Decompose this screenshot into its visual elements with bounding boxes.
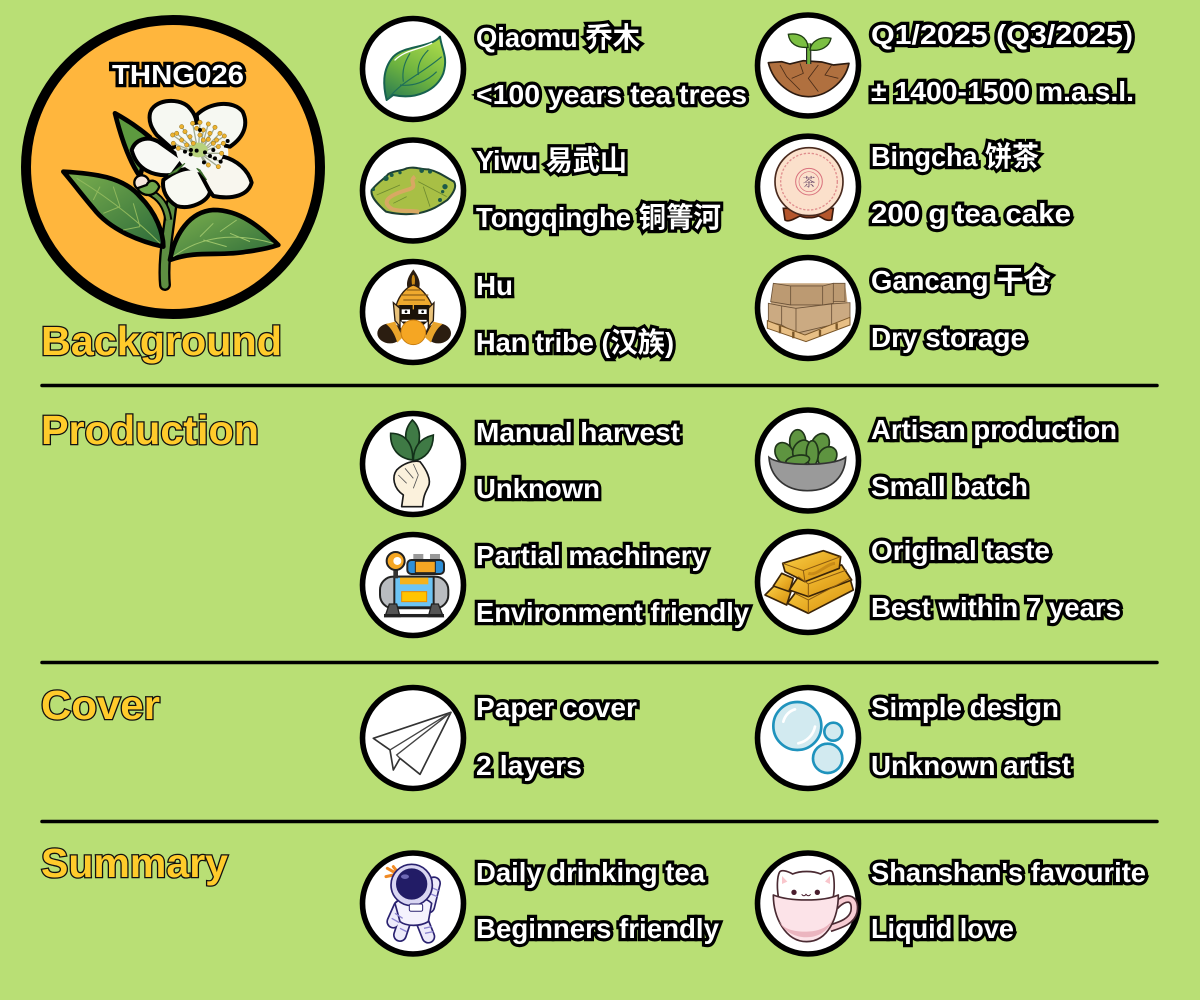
text: Manual harvest: Manual harvest: [476, 417, 680, 448]
text: Dry storage: Dry storage: [871, 322, 1026, 353]
text: Liquid love: Liquid love: [871, 913, 1014, 944]
item: region: [362, 140, 721, 241]
item: usage: [362, 853, 719, 954]
heading: Summary: Summary: [41, 840, 228, 886]
item: processing: [362, 534, 749, 636]
text: Beginners friendly: Beginners friendly: [476, 913, 719, 944]
text: Han tribe: Han tribe (汉族): [476, 327, 674, 358]
item: storage: [758, 258, 1051, 358]
icon: cat in cup: [758, 853, 858, 954]
text: altitude: ± 1400-1500 m.a.s.l.: [871, 76, 1134, 107]
item: harvest method: [362, 414, 680, 514]
text: Daily drinking tea: Daily drinking tea: [476, 857, 705, 888]
item: producer: [362, 262, 674, 362]
text: Qiaomu: Qiaomu 乔木: [476, 22, 640, 53]
icon: golden guardian: [362, 262, 464, 362]
badge code: THNG026: [112, 59, 244, 90]
icon: leaf: [362, 18, 464, 120]
icon: gold bars: [758, 532, 858, 632]
item: tree type: [362, 18, 747, 120]
item: harvest date: [758, 15, 1134, 116]
icon: bubbles: [758, 688, 858, 788]
divider: [42, 384, 1157, 387]
item: aging: [758, 532, 1121, 632]
text: Unknown artist: Unknown artist: [871, 750, 1071, 781]
icon: tea flower: [63, 101, 278, 285]
icon: sprout in soil: [758, 15, 858, 116]
divider: [42, 661, 1157, 664]
text: Tongqinghe: Tongqinghe 铜箐河: [476, 202, 721, 233]
panel: summary: [41, 840, 1146, 954]
text: Best within 7 years: Best within 7 years: [871, 592, 1121, 623]
text: weight: 200 g tea cake: [871, 198, 1071, 229]
icon: bowl of leaves: [758, 410, 858, 511]
icon: paper plane: [362, 688, 464, 788]
text: Small batch: Small batch: [871, 471, 1028, 502]
text: Unknown: Unknown: [476, 473, 600, 504]
icon: astronaut: [362, 853, 464, 954]
panel: production: [41, 407, 1121, 636]
text: Gancang: Gancang 干仓: [871, 265, 1051, 296]
text: date: Q1/2025 (Q3/2025): [871, 19, 1133, 50]
item: production scale: [758, 410, 1117, 511]
text: Paper cover: Paper cover: [476, 692, 637, 723]
icon: machine: [362, 534, 464, 636]
heading: Production: Production: [41, 407, 259, 453]
text: Simple design: Simple design: [871, 692, 1059, 723]
heading: Cover: Cover: [41, 682, 160, 728]
item: design: [758, 688, 1071, 788]
text: tree age: <100 years tea trees: [476, 79, 747, 110]
text: Shanshan's favourite: Shanshan's favourite: [871, 857, 1146, 888]
icon: hand holding leaves: [362, 414, 464, 514]
divider: [42, 820, 1157, 823]
icon: tea cake: [758, 136, 858, 237]
text: Bingcha: Bingcha 饼茶: [871, 141, 1039, 172]
item: wrapper: [362, 688, 637, 788]
text: Original taste: Original taste: [871, 535, 1050, 566]
text: Environment friendly: Environment friendly: [476, 597, 749, 628]
text: Hu: Hu: [476, 270, 513, 301]
heading: Background: Background: [41, 318, 282, 364]
text: Partial machinery: Partial machinery: [476, 540, 707, 571]
panel: cover: [41, 682, 1071, 788]
text: 2 layers: 2 layers: [476, 750, 582, 781]
item: verdict: [758, 853, 1146, 954]
text: Yiwu: Yiwu 易武山: [476, 145, 627, 176]
icon: mountain map: [362, 140, 464, 241]
item: tea form: [758, 136, 1071, 237]
panel: background: [26, 15, 1134, 364]
badge: tea flower emblem: [26, 20, 320, 314]
icon: boxes on pallet: [758, 258, 858, 358]
icon: tea cake: 茶: [803, 171, 816, 190]
text: Artisan production: Artisan production: [871, 414, 1117, 445]
